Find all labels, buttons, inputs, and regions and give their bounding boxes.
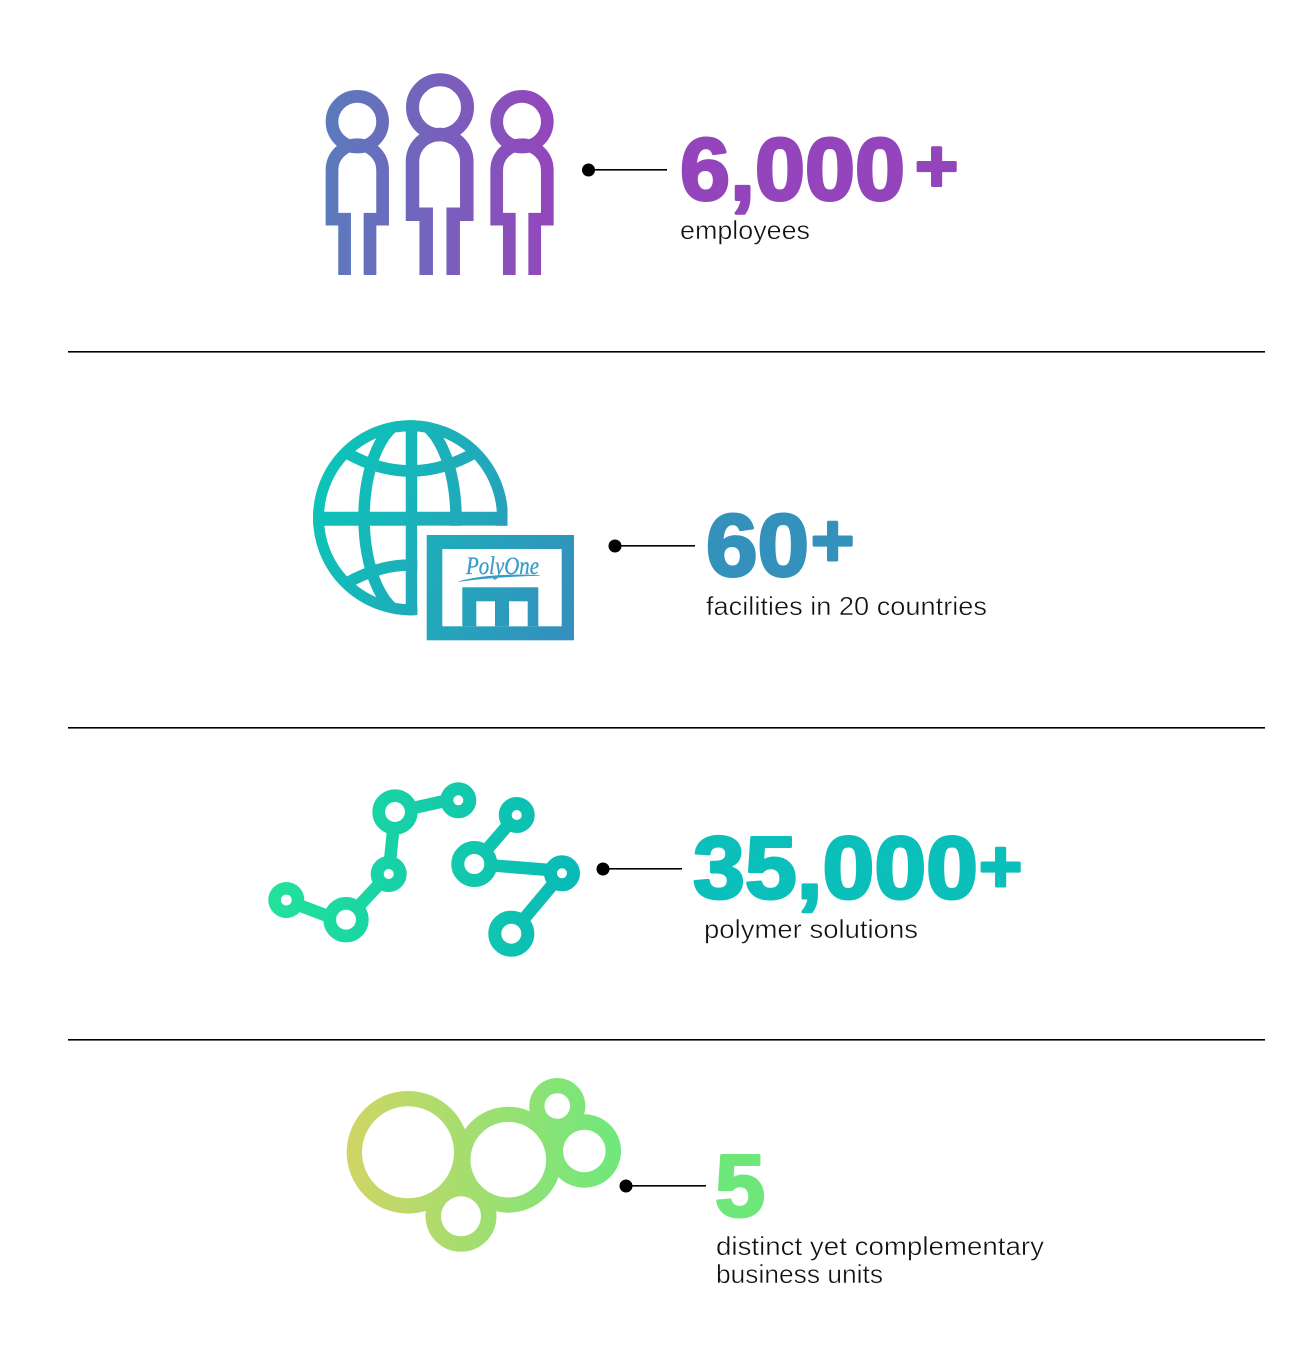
stat: 35,000+: + <box>979 825 1022 908</box>
label: distinct yet complementary business units <box>716 1231 1044 1289</box>
label: distinct yet complementary business units: distinct yet complementary <box>716 1231 1044 1261</box>
stat: 60+ <box>706 496 854 594</box>
stat: 60+: + <box>811 499 854 582</box>
label: polymer solutions: polymer solutions <box>704 914 918 944</box>
connector <box>620 1180 706 1192</box>
label: distinct yet complementary business units: business units <box>716 1259 883 1289</box>
icon: three people <box>332 80 547 275</box>
divider <box>68 727 1265 729</box>
stat: 5: 5 <box>715 1136 765 1235</box>
label: employees: employees <box>680 215 810 245</box>
stat: 6,000+: + <box>915 124 958 208</box>
panel: facilities <box>300 415 987 640</box>
connector <box>608 540 695 552</box>
connector <box>596 862 682 876</box>
divider <box>68 351 1265 353</box>
icon: molecules <box>275 789 574 950</box>
stat: 60+: 60 <box>706 496 809 594</box>
divider <box>68 1039 1265 1041</box>
panel: business units <box>347 1078 1044 1289</box>
label: facilities in 20 countries: facilities in 20 countries <box>706 591 987 621</box>
icon: circles <box>347 1078 621 1252</box>
panel: employees <box>332 80 958 275</box>
stat: 6,000+: 6,000 <box>680 120 905 218</box>
connector <box>582 164 667 176</box>
stat: 35,000+: 35,000 <box>693 818 978 917</box>
panel: polymer solutions <box>275 789 1022 950</box>
icon: factory <box>427 535 574 640</box>
logo: PolyOne: PolyOne <box>465 553 539 580</box>
icon: globe <box>313 420 508 616</box>
